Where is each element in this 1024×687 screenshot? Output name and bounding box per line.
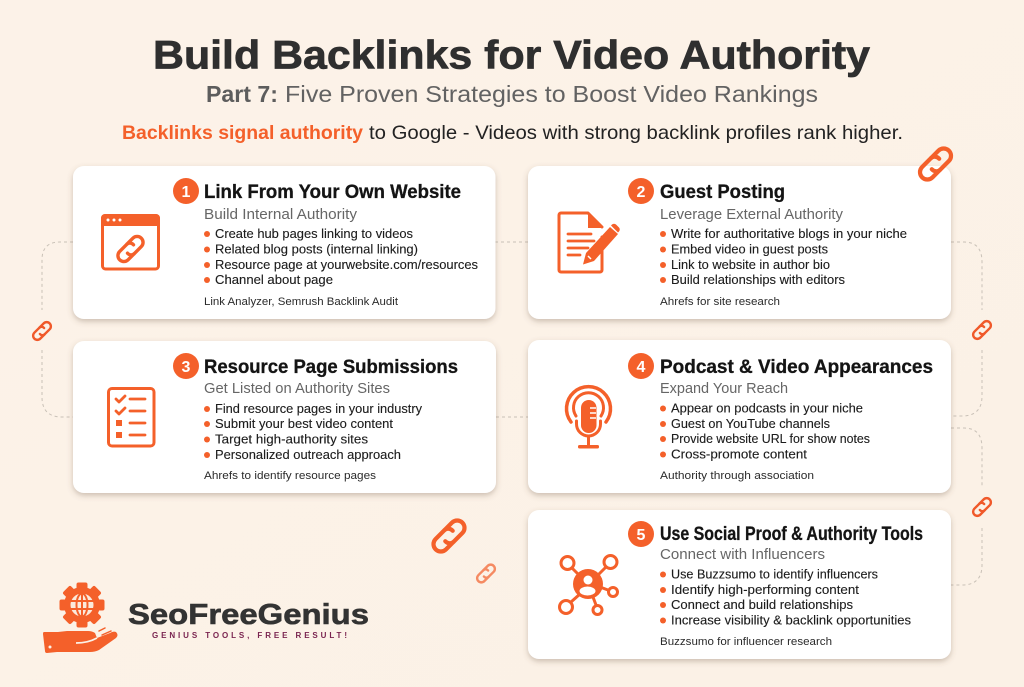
number badge 1: 1 <box>182 184 191 201</box>
icon: chain link right lower <box>971 496 993 518</box>
icon: chain link left <box>31 320 53 342</box>
tools note: Buzzsumo for influencer research <box>660 636 832 648</box>
bullet list: Guest on YouTube channels <box>671 417 830 431</box>
title: Build Backlinks for Video Authority <box>153 34 871 78</box>
tools note: Link Analyzer, Semrush Backlink Audit <box>204 296 398 308</box>
icon: document with pencil <box>559 213 620 272</box>
number badge 4 <box>628 353 654 379</box>
bullet list <box>204 227 478 287</box>
bullet list: Use Buzzsumo to identify influencers <box>671 568 878 582</box>
bullet list: Find resource pages in your industry <box>215 402 423 416</box>
bullet list: Related blog posts (internal linking) <box>215 242 418 256</box>
tools note: Ahrefs for site research <box>660 296 780 308</box>
icon: open hand <box>43 628 118 653</box>
icon: chain link center small <box>475 563 497 584</box>
bullet list: Link to website in author bio <box>671 258 830 272</box>
icon: influencer network <box>560 556 618 614</box>
tools note: Authority through association <box>660 470 814 482</box>
subheading: Expand Your Reach <box>660 381 788 397</box>
tools note: Ahrefs to identify resource pages <box>204 470 377 482</box>
bullet list: Create hub pages linking to videos <box>215 227 413 241</box>
brand name: SeoFreeGenius <box>128 599 369 631</box>
subtitle: Part 7: <box>206 81 278 107</box>
bullet list: Submit your best video content <box>215 417 394 431</box>
subheading: Build Internal Authority <box>204 207 358 223</box>
number badge 2: 2 <box>637 184 646 201</box>
icon: chain link top right <box>917 145 954 183</box>
bullet list <box>660 227 907 287</box>
bullet list <box>660 402 870 462</box>
number badge 5 <box>628 521 654 547</box>
number badge 4: 4 <box>637 359 646 376</box>
bullet list: Increase visibility & backlink opportunities <box>671 614 911 628</box>
icon: checklist <box>108 388 154 446</box>
subheading: Get Listed on Authority Sites <box>204 381 390 397</box>
bullet list <box>204 402 423 462</box>
number badge 5: 5 <box>637 527 646 544</box>
bullet list: Identify high-performing content <box>671 583 860 597</box>
connector lines <box>42 242 982 585</box>
tagline <box>122 122 903 144</box>
heading: Guest Posting <box>660 182 785 203</box>
icon: browser with link <box>101 214 160 269</box>
icon: chain link center large <box>430 517 468 555</box>
bullet list: Build relationships with editors <box>671 273 845 287</box>
number badge 3 <box>173 353 199 379</box>
panel: link from your own website <box>73 166 496 319</box>
number badge 2 <box>628 178 654 204</box>
subheading: Connect with Influencers <box>660 547 825 563</box>
bullet list: Channel about page <box>215 273 333 287</box>
tagline: to Google - Videos with strong backlink profiles rank higher. <box>369 122 903 144</box>
bullet list: Provide website URL for show notes <box>671 432 870 446</box>
subtitle: Five Proven Strategies to Boost Video Rankings <box>285 81 818 107</box>
heading: Resource Page Submissions <box>204 357 458 378</box>
bullet list: Appear on podcasts in your niche <box>671 402 863 416</box>
bullet list: Embed video in guest posts <box>671 242 828 256</box>
bullet list: Connect and build relationships <box>671 598 853 612</box>
bullet list: Resource page at yourwebsite.com/resources <box>215 258 478 272</box>
number badge 1 <box>173 178 199 204</box>
panel: social proof and authority tools <box>528 510 951 659</box>
bullet list: Write for authoritative blogs in your niche <box>671 227 907 241</box>
number badge 3: 3 <box>182 359 191 376</box>
icon: chain link right upper <box>971 319 993 341</box>
icon: microphone <box>566 387 610 448</box>
subheading: Leverage External Authority <box>660 207 844 223</box>
bullet list: Personalized outreach approach <box>215 448 401 462</box>
brand slogan: GENIUS TOOLS, FREE RESULT! <box>152 631 347 640</box>
panel: resource page submissions <box>73 341 496 493</box>
logo <box>43 582 369 653</box>
bullet list <box>660 568 911 628</box>
bullet list: Cross-promote content <box>671 448 808 462</box>
tagline: Backlinks signal authority <box>122 122 363 144</box>
heading: Podcast & Video Appearances <box>660 357 933 378</box>
heading: Link From Your Own Website <box>204 182 461 203</box>
icon: gear with globe <box>60 582 104 628</box>
bullet list: Target high-authority sites <box>215 432 368 446</box>
heading: Use Social Proof & Authority Tools <box>660 524 923 545</box>
panel: guest posting <box>528 166 951 319</box>
panel: podcast and video appearances <box>528 340 951 493</box>
